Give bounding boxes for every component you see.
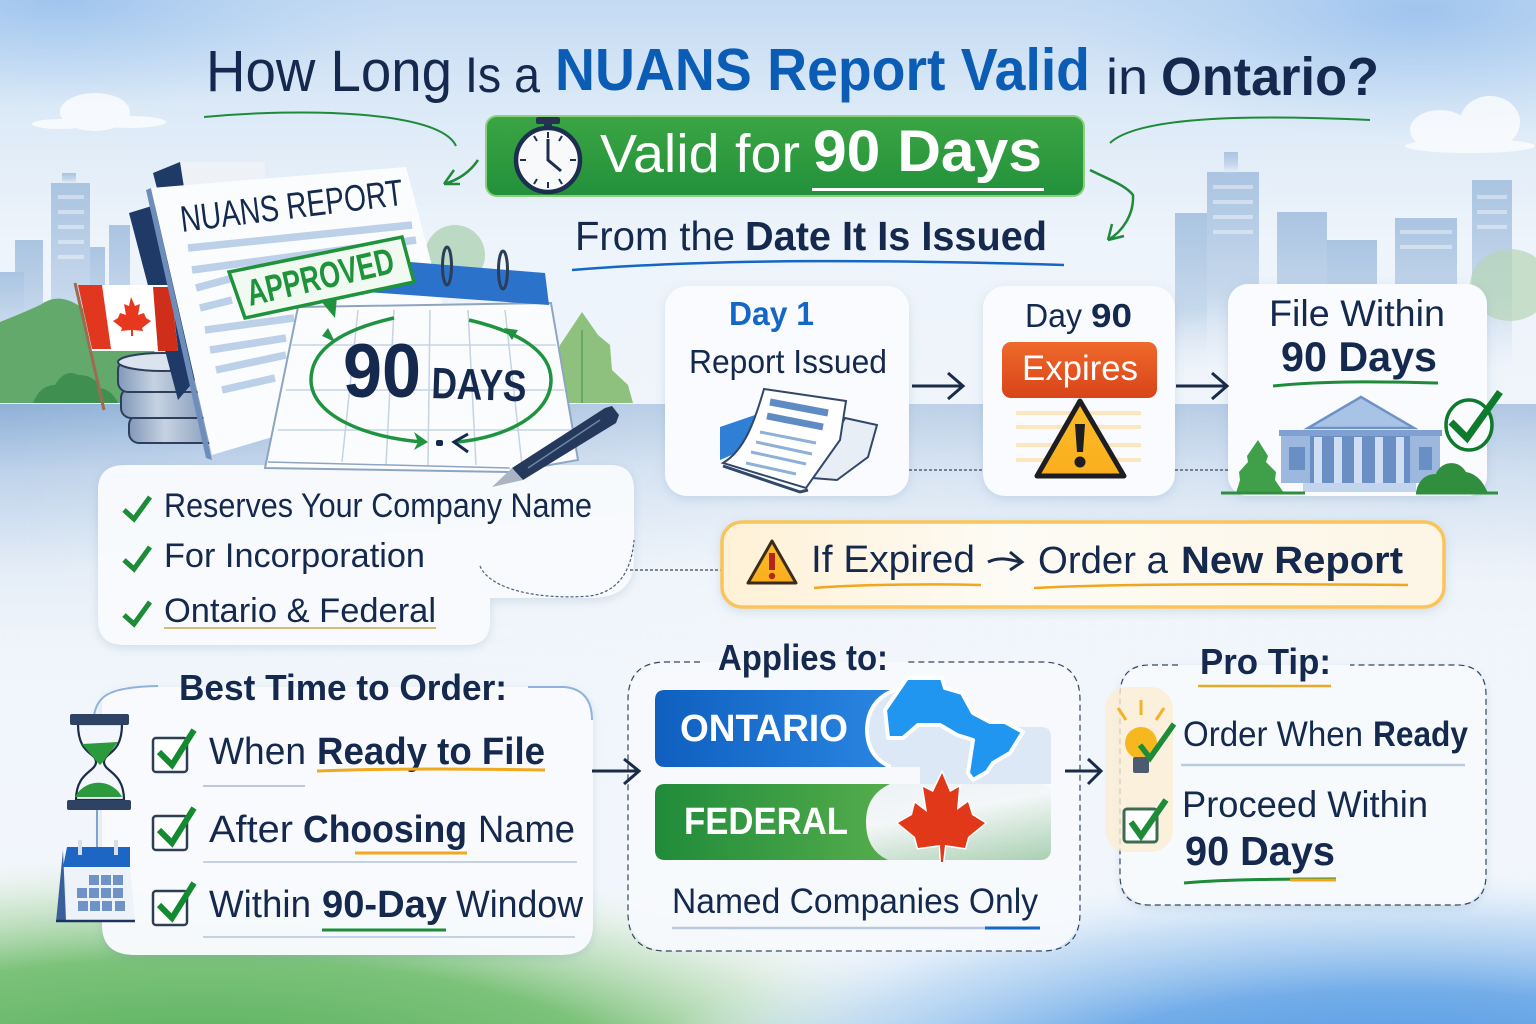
calendar: DAYS [431, 359, 527, 411]
subtitle: Date It Is Issued [745, 213, 1047, 259]
trees and far haze [0, 299, 190, 403]
panel: applies to: Named Companies Only [672, 882, 1038, 921]
federal button [655, 773, 1051, 862]
panel: pro tip: Order When [1183, 715, 1363, 754]
icon: checkbox [1124, 800, 1166, 842]
icon: hourglass [67, 714, 131, 810]
icon: canadian flag [75, 283, 178, 410]
stamp: approved [229, 237, 414, 318]
row: within 90-day window: Within [209, 884, 311, 926]
panel: report benefits: Reserves Your Company Name [164, 487, 592, 525]
row: within 90-day window: 90-Day [322, 884, 447, 926]
panel: report benefits [98, 465, 634, 645]
callout: if expired: Order a [1038, 540, 1169, 582]
dashed connectors [630, 470, 1228, 570]
icon: pen [492, 406, 619, 487]
federal button: FEDERAL [684, 801, 848, 843]
panel: pro tip: 90 Days [1185, 828, 1335, 874]
banner: valid for 90 days: Valid for [600, 124, 800, 184]
title: How Long [206, 39, 452, 104]
calendar: 90 [343, 329, 421, 414]
timeline card: day 90 [983, 286, 1175, 496]
circular arrows [311, 318, 551, 442]
timeline card: day 90: 90 [1091, 297, 1132, 334]
subtitle [572, 213, 1064, 270]
title: Ontario? [1161, 47, 1379, 107]
panel: pro tip [1105, 641, 1486, 905]
icon: warning triangle [1037, 401, 1124, 476]
panel: applies to [628, 637, 1080, 951]
callout: if expired: If Expired [811, 539, 975, 581]
icon: stopwatch [516, 117, 580, 192]
row: within 90-day window [153, 883, 584, 937]
icon: calendar [56, 840, 135, 922]
stamp: approved: APPROVED [243, 240, 398, 314]
title [206, 37, 1379, 107]
row: when ready to file [153, 730, 545, 786]
illustration: report, flag, calendar, pen [75, 162, 619, 487]
timeline card: file within 90 days [1221, 284, 1500, 496]
report sheet: NUANS REPORT [178, 172, 405, 240]
icon: maple leaf [898, 773, 985, 862]
timeline card: day 90: Expires [1022, 349, 1138, 388]
timeline card: day 90: Day [1025, 297, 1082, 334]
banner: valid for 90 days: 90 Days [813, 119, 1042, 184]
row: after choosing name: Choosing [303, 809, 467, 851]
title: Is a [465, 47, 540, 103]
icon: green check circle [1446, 392, 1500, 450]
icon: government building [1221, 397, 1498, 493]
timeline card: file within 90 days: 90 Days [1281, 333, 1437, 380]
title: NUANS Report Valid [555, 37, 1090, 103]
panel: best time to order [56, 667, 593, 955]
panel: report benefits: For Incorporation [164, 537, 425, 575]
calendar [265, 247, 578, 472]
title: in [1106, 49, 1148, 105]
timeline card: file within 90 days: File Within [1269, 293, 1445, 334]
curved arrows around banner [204, 112, 1370, 240]
panel: applies to: Applies to: [718, 637, 888, 678]
row: within 90-day window: Window [456, 884, 584, 926]
skyline left [0, 173, 130, 373]
ontario button: ONTARIO [680, 708, 848, 750]
icon: documents [720, 389, 877, 492]
timeline card: day 1: Day 1 [729, 295, 814, 332]
arrow: day 90 to file [1176, 373, 1227, 399]
icon: coin stack [118, 353, 219, 443]
banner: valid for 90 days [486, 116, 1084, 196]
icon: warning triangle small [748, 541, 796, 583]
skyline right [1175, 152, 1512, 373]
panel: report benefits: Ontario & Federal [164, 592, 436, 630]
arrow: best time to applies [592, 759, 639, 784]
callout: if expired [722, 522, 1444, 607]
report sheet [146, 167, 470, 460]
panel: pro tip: Proceed Within [1182, 784, 1428, 825]
subtitle: From the [575, 213, 735, 259]
folders behind report [129, 162, 265, 400]
callout: if expired: New Report [1181, 540, 1403, 582]
panel: pro tip: Pro Tip: [1200, 641, 1331, 682]
timeline card: day 1: Report Issued [689, 343, 887, 380]
arrow: day 1 to day 90 [912, 373, 963, 399]
panel: best time to order: Best Time to Order: [179, 667, 507, 708]
timeline card: day 1 [665, 286, 909, 496]
row: after choosing name: After [209, 809, 293, 851]
panel: pro tip: Ready [1373, 715, 1468, 754]
icon: light bulb [1118, 700, 1174, 773]
ontario button [655, 678, 1051, 784]
row: when ready to file: When [209, 731, 306, 773]
row: when ready to file: Ready to File [317, 731, 545, 773]
arrow: applies to pro tip [1065, 759, 1101, 784]
icon: ontario map [885, 678, 1023, 780]
row: after choosing name [153, 808, 577, 862]
row: after choosing name: Name [478, 809, 575, 851]
